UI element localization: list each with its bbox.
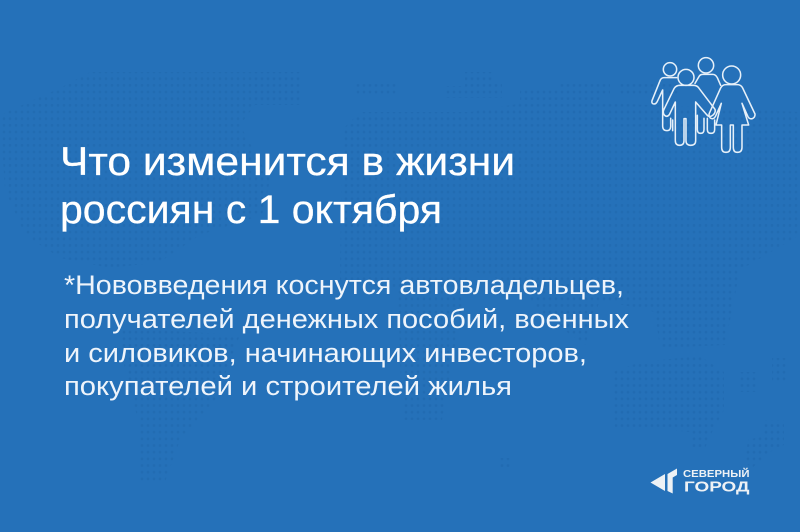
description text: покупателей и строителей жилья: [64, 371, 512, 401]
icon: group of people: [652, 58, 755, 152]
icon part: back centre person: [695, 58, 721, 133]
icon part: front left person: [663, 69, 715, 145]
description text: [64, 270, 630, 401]
title: Что изменится в жизни: [60, 140, 515, 184]
icon part: right woman: [709, 66, 755, 152]
description text: и силовиков, начинающих инвесторов,: [64, 338, 587, 368]
logo mark: [650, 468, 677, 494]
logo text: ГОРОД: [684, 478, 750, 496]
title: россиян с 1 октября: [60, 188, 442, 232]
description text: получателей денежных пособий, военных: [64, 304, 630, 334]
icon part: back left person: [652, 63, 677, 131]
title: [60, 140, 515, 232]
description text: *Нововведения коснутся автовладельцев,: [64, 270, 624, 300]
dotted world map: [0, 72, 800, 482]
logo text: СЕВЕРНЫЙ: [683, 468, 750, 480]
logo: Северный город: [650, 468, 750, 496]
logo text: [683, 468, 750, 496]
